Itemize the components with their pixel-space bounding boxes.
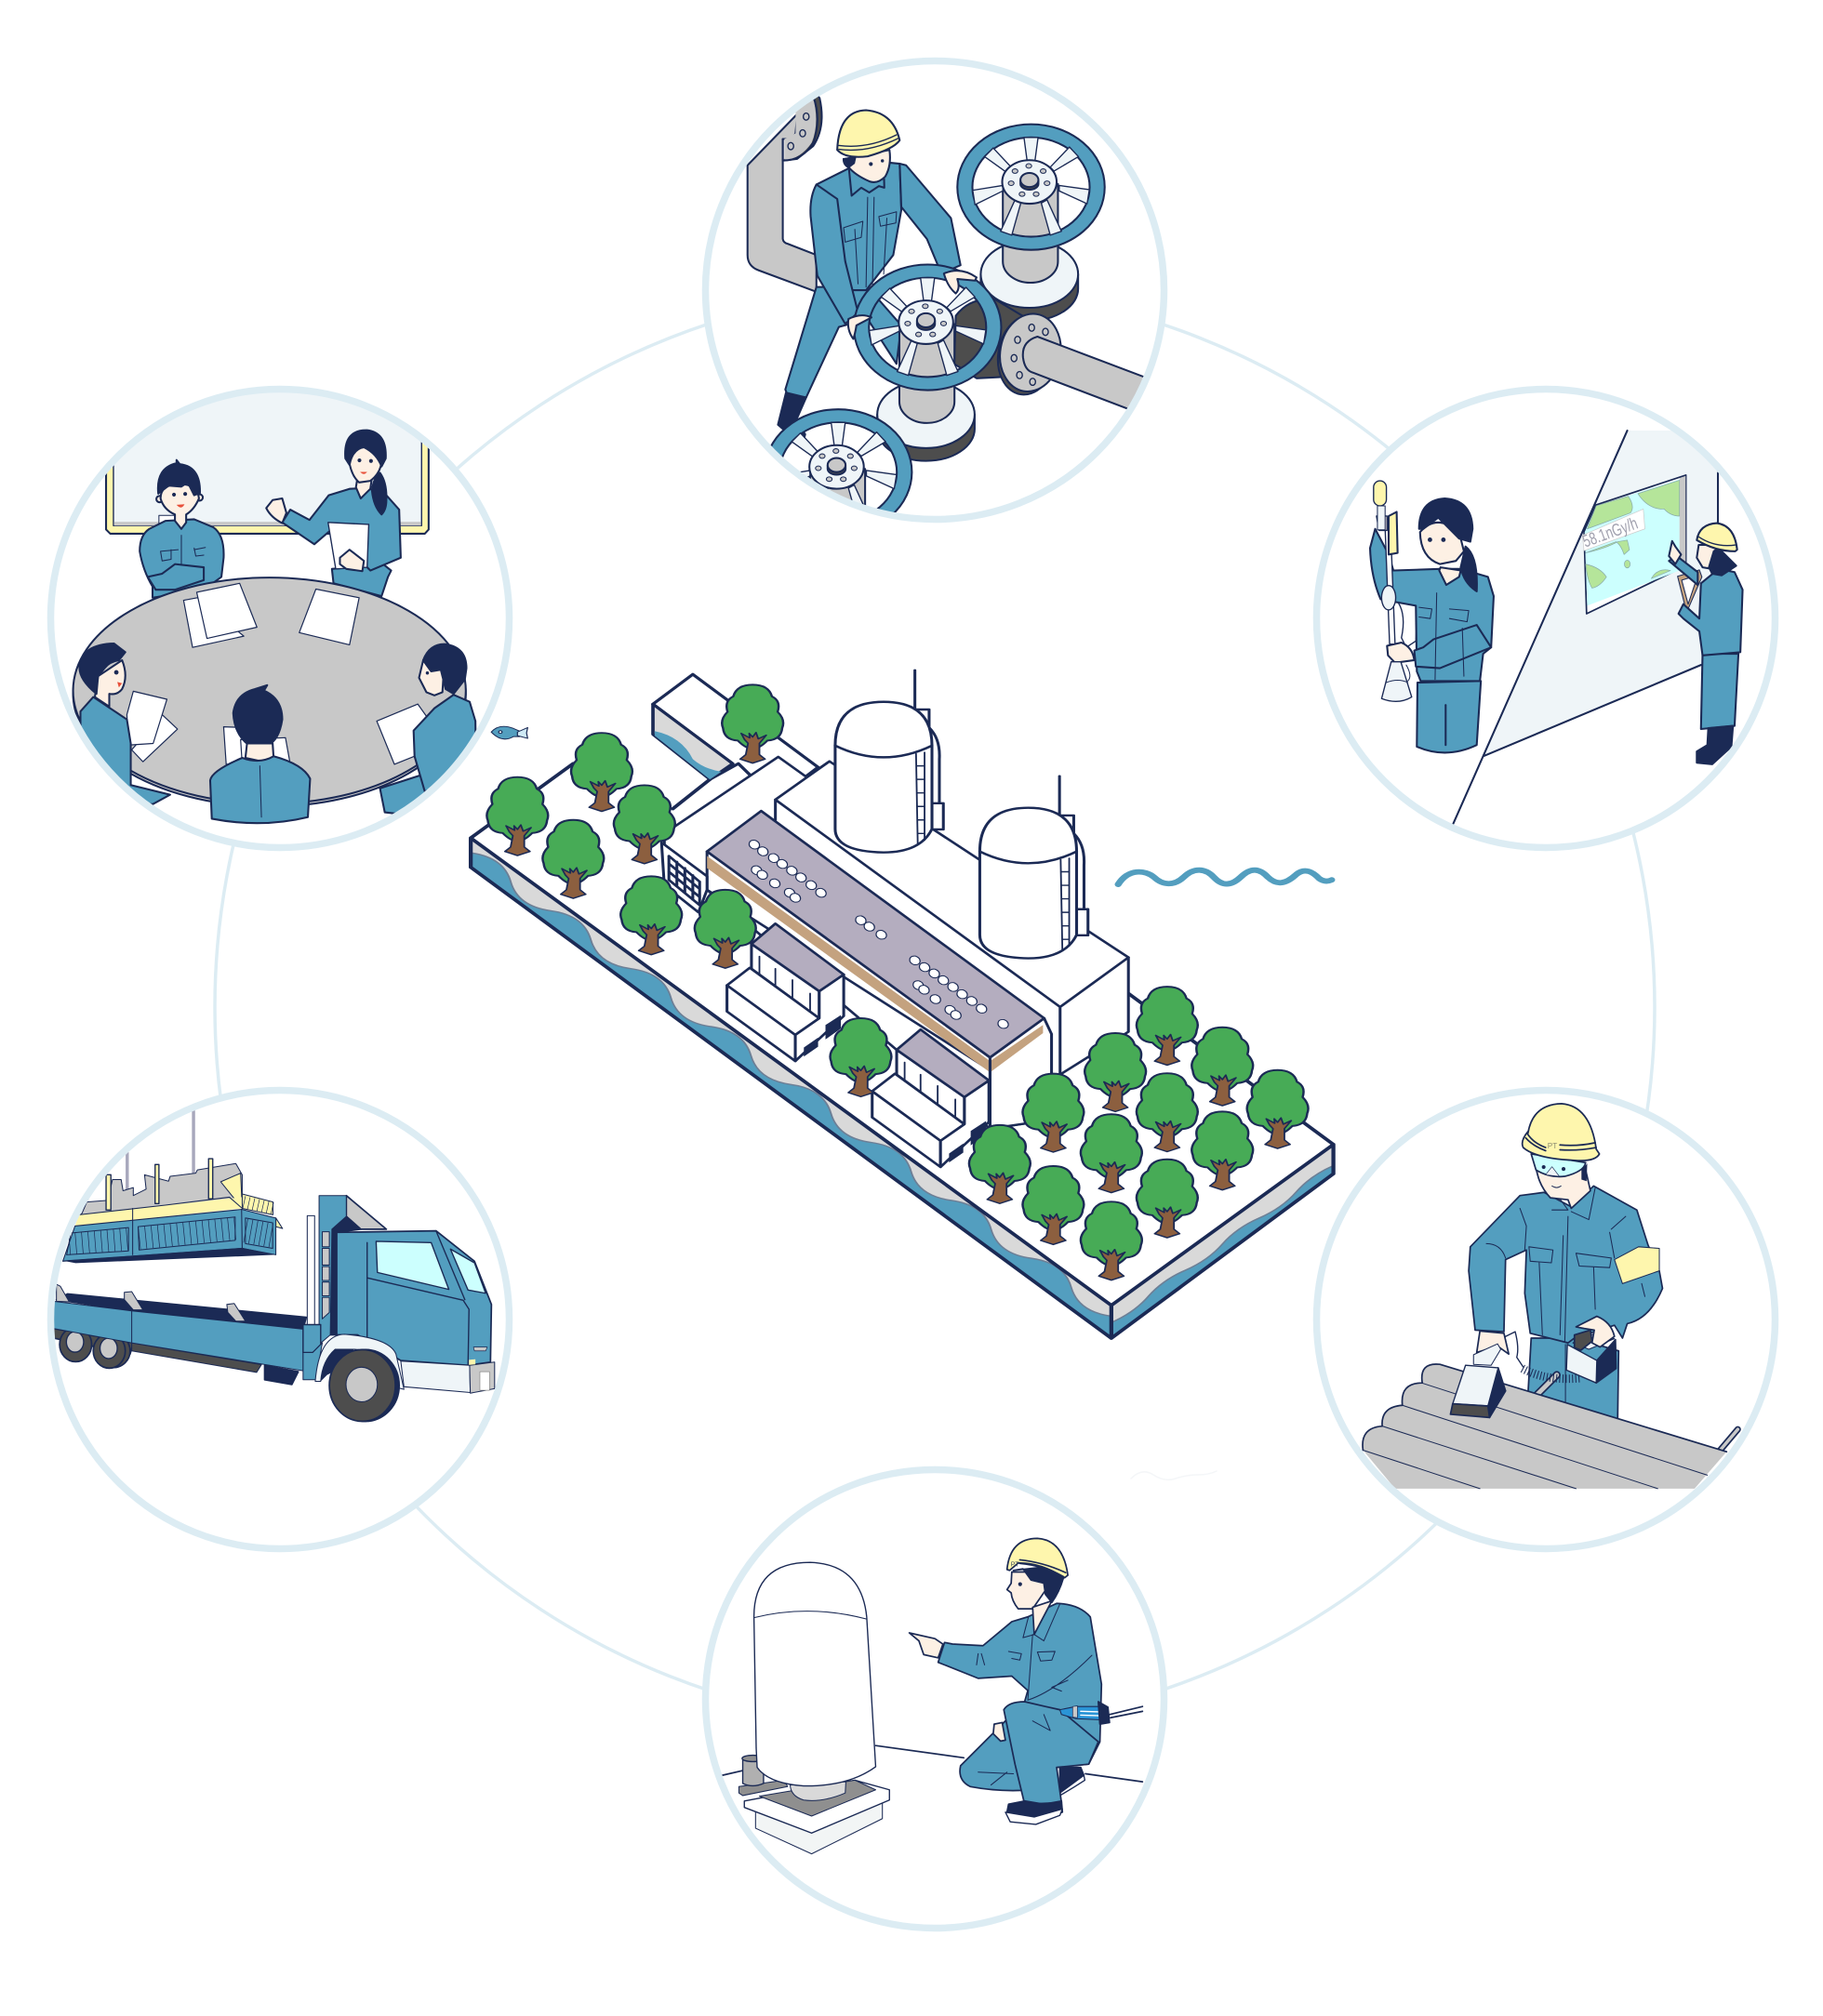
rear wheels [53, 1327, 133, 1368]
head and helmet: PT [1548, 1142, 1557, 1150]
cab [303, 1196, 495, 1393]
platform base with water sides [471, 762, 1334, 1338]
chassis [132, 1343, 299, 1385]
woman with sampler [1370, 481, 1494, 752]
standing woman [266, 431, 401, 596]
pipe [748, 86, 822, 292]
ring: truck scene [50, 1090, 510, 1549]
table [73, 577, 466, 806]
whiteboard [105, 392, 430, 535]
worker trousers [1528, 1338, 1618, 1420]
scene: truck transport [53, 1111, 495, 1422]
map [1580, 475, 1686, 614]
ring: monitoring post scene [705, 1469, 1164, 1929]
wave [1118, 870, 1332, 884]
map: 58.1nGy/h [1580, 513, 1640, 550]
front wheel [329, 1349, 399, 1422]
scene: meeting [73, 356, 476, 823]
reactor dome 2 [979, 776, 1088, 959]
suspended module [62, 1111, 283, 1263]
head and helmet [1523, 1104, 1600, 1208]
ring: pipe inspection scene [1317, 1090, 1775, 1549]
man at map [1669, 524, 1743, 764]
reactor dome 1 [835, 670, 943, 853]
scene: valve operation [703, 95, 1144, 523]
small water intake block [653, 674, 818, 800]
meter box and hand [1566, 1317, 1617, 1383]
floor lines [722, 1745, 1142, 1782]
pipes [1363, 1364, 1726, 1489]
monitoring post tank [739, 1562, 889, 1854]
back rod [1537, 1375, 1737, 1451]
trees [486, 684, 1309, 1280]
table papers [183, 583, 359, 647]
crouching worker: PT [1011, 1561, 1019, 1568]
connecting ring between scenes [215, 287, 1655, 1727]
hands on wheel [848, 271, 977, 338]
seated centre back [210, 685, 310, 823]
scene: monitoring post [722, 1538, 1142, 1854]
worker jacket [1469, 1186, 1662, 1343]
truck bed [53, 1284, 306, 1371]
auxiliary building A [727, 923, 844, 1061]
ring: meeting scene [50, 389, 510, 848]
reactor building block [664, 757, 1128, 1129]
coiled cable [1523, 1369, 1581, 1379]
back valve [957, 125, 1105, 321]
seated right [377, 644, 476, 817]
annex with window grid [661, 842, 707, 912]
auxiliary building B [872, 1029, 989, 1167]
front valve [854, 265, 1001, 461]
standing man [140, 460, 224, 598]
scene: pipe inspection [1363, 1104, 1737, 1489]
valve body and flanged pipe [954, 298, 1144, 409]
ring: sampling scene [1317, 389, 1775, 848]
survey meter probe [1450, 1331, 1524, 1417]
wall [1454, 431, 1718, 824]
central illustration: isometric power plant [471, 670, 1334, 1338]
lower valve [770, 408, 913, 513]
rooftop units [749, 841, 1008, 1028]
fish [491, 726, 527, 739]
turbine hall with roof [707, 811, 1052, 1129]
crouching worker [910, 1538, 1142, 1824]
scene: sampling and map [1370, 431, 1743, 824]
ring: valve scene [705, 61, 1164, 519]
worker [778, 111, 961, 445]
seated left [79, 643, 178, 804]
